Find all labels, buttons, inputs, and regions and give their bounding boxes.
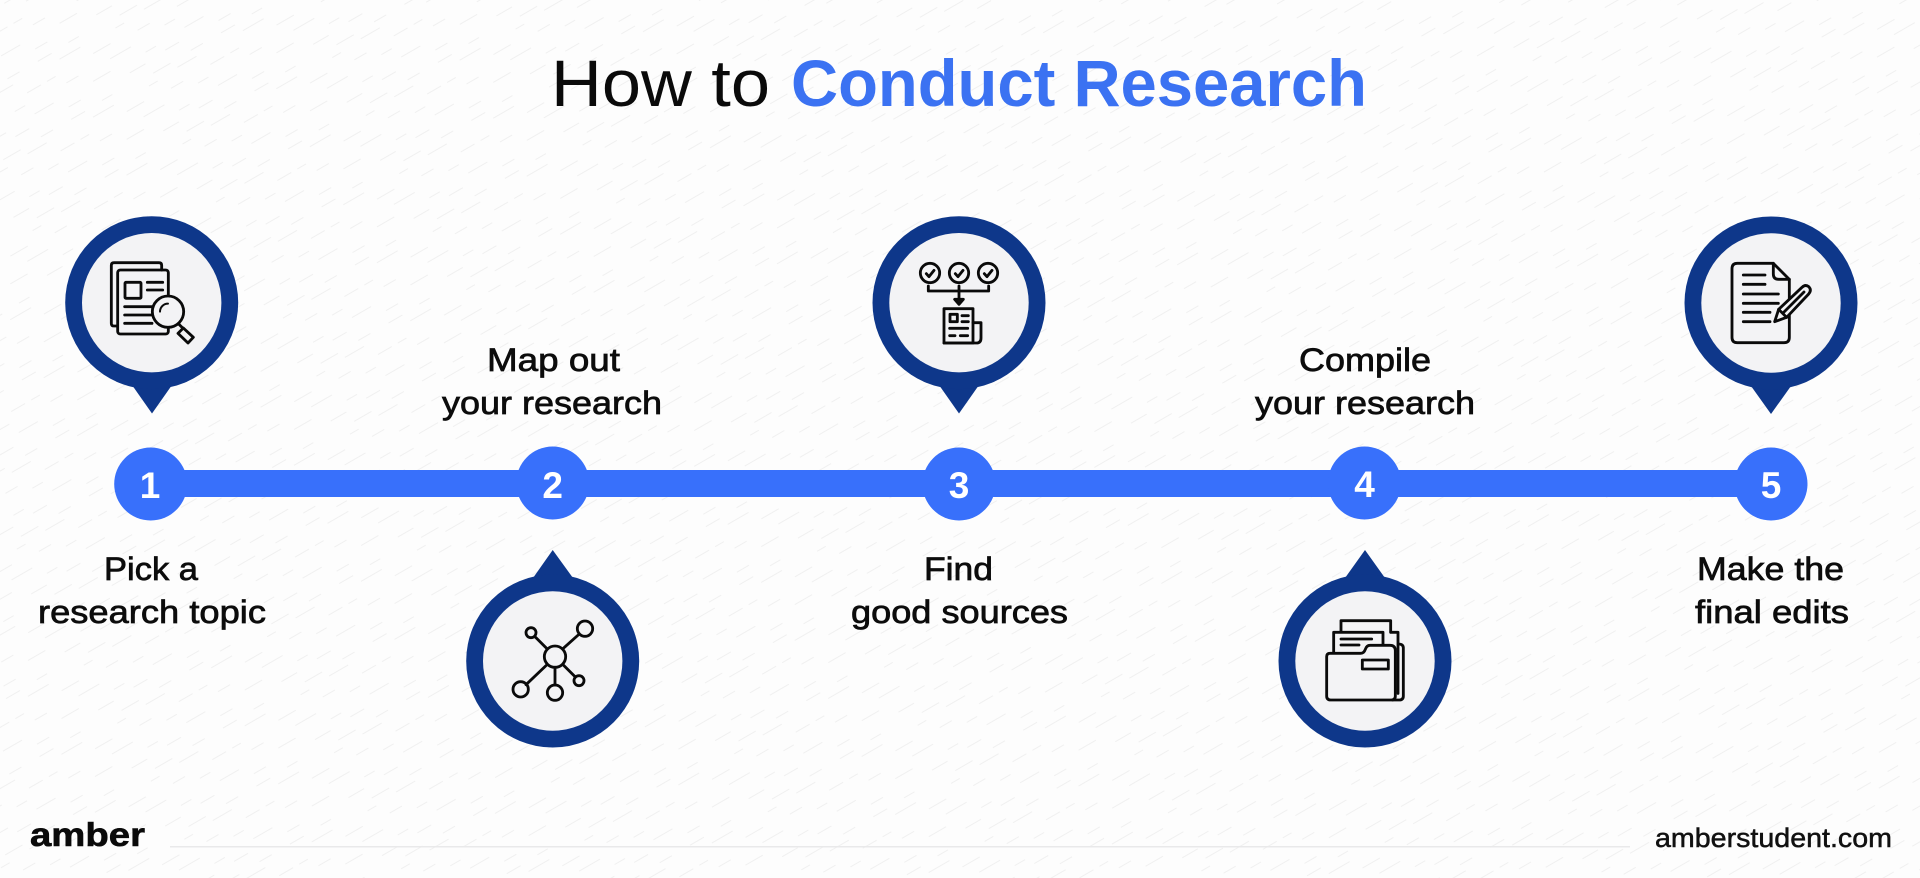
icon: checks into document xyxy=(920,263,998,343)
label: Find good sources xyxy=(851,551,1068,630)
step 3 xyxy=(851,216,1068,630)
icon: folder with papers xyxy=(1327,621,1403,700)
step number 3 xyxy=(922,448,996,520)
label: Map out your research xyxy=(442,342,662,421)
label: Compile your research xyxy=(1255,342,1475,421)
label: Make the final edits xyxy=(1695,551,1849,630)
label: Make the final edits: final edits xyxy=(1695,594,1849,630)
footer url: amberstudent.com xyxy=(1655,823,1892,853)
step 1 xyxy=(38,216,266,630)
pin with network icon xyxy=(466,550,639,748)
label: Find good sources: Find xyxy=(924,551,993,587)
step 5 xyxy=(1684,216,1858,630)
title: How to xyxy=(551,46,770,120)
step number 2 xyxy=(516,446,589,520)
footer divider xyxy=(170,846,1630,848)
label: Pick a research topic xyxy=(38,551,266,630)
title: Conduct Research xyxy=(791,46,1367,120)
step 2 xyxy=(442,342,662,748)
label: Find good sources: good sources xyxy=(851,594,1068,630)
label: Pick a research topic: research topic xyxy=(38,594,266,630)
step number 4 xyxy=(1328,446,1401,520)
label: Compile your research: your research xyxy=(1255,385,1475,421)
step number 5 xyxy=(1734,448,1808,520)
label: Compile your research: Compile xyxy=(1299,342,1431,378)
step number 1 xyxy=(114,448,187,520)
label: Pick a research topic: Pick a xyxy=(104,551,198,587)
icon: network nodes xyxy=(513,621,593,700)
label: Make the final edits: Make the xyxy=(1697,551,1844,587)
step number 4: 4 xyxy=(1354,464,1375,505)
step number 2: 2 xyxy=(542,465,563,506)
step number 1: 1 xyxy=(140,465,160,506)
pin with document and pencil icon xyxy=(1684,216,1858,414)
label: Map out your research: your research xyxy=(442,385,662,421)
step number 3: 3 xyxy=(949,465,969,506)
pin with research document icon xyxy=(65,216,238,414)
icon: document with magnifier xyxy=(111,263,193,343)
pin with sources icon xyxy=(872,216,1046,414)
pin with folder icon xyxy=(1278,550,1452,748)
icon: document and pencil xyxy=(1732,263,1810,343)
step 4 xyxy=(1255,342,1475,748)
label: Map out your research: Map out xyxy=(487,342,620,378)
footer logo: amber: amber xyxy=(30,816,145,853)
title xyxy=(551,46,1367,120)
timeline bar xyxy=(150,470,1770,497)
step number 5: 5 xyxy=(1761,465,1781,506)
